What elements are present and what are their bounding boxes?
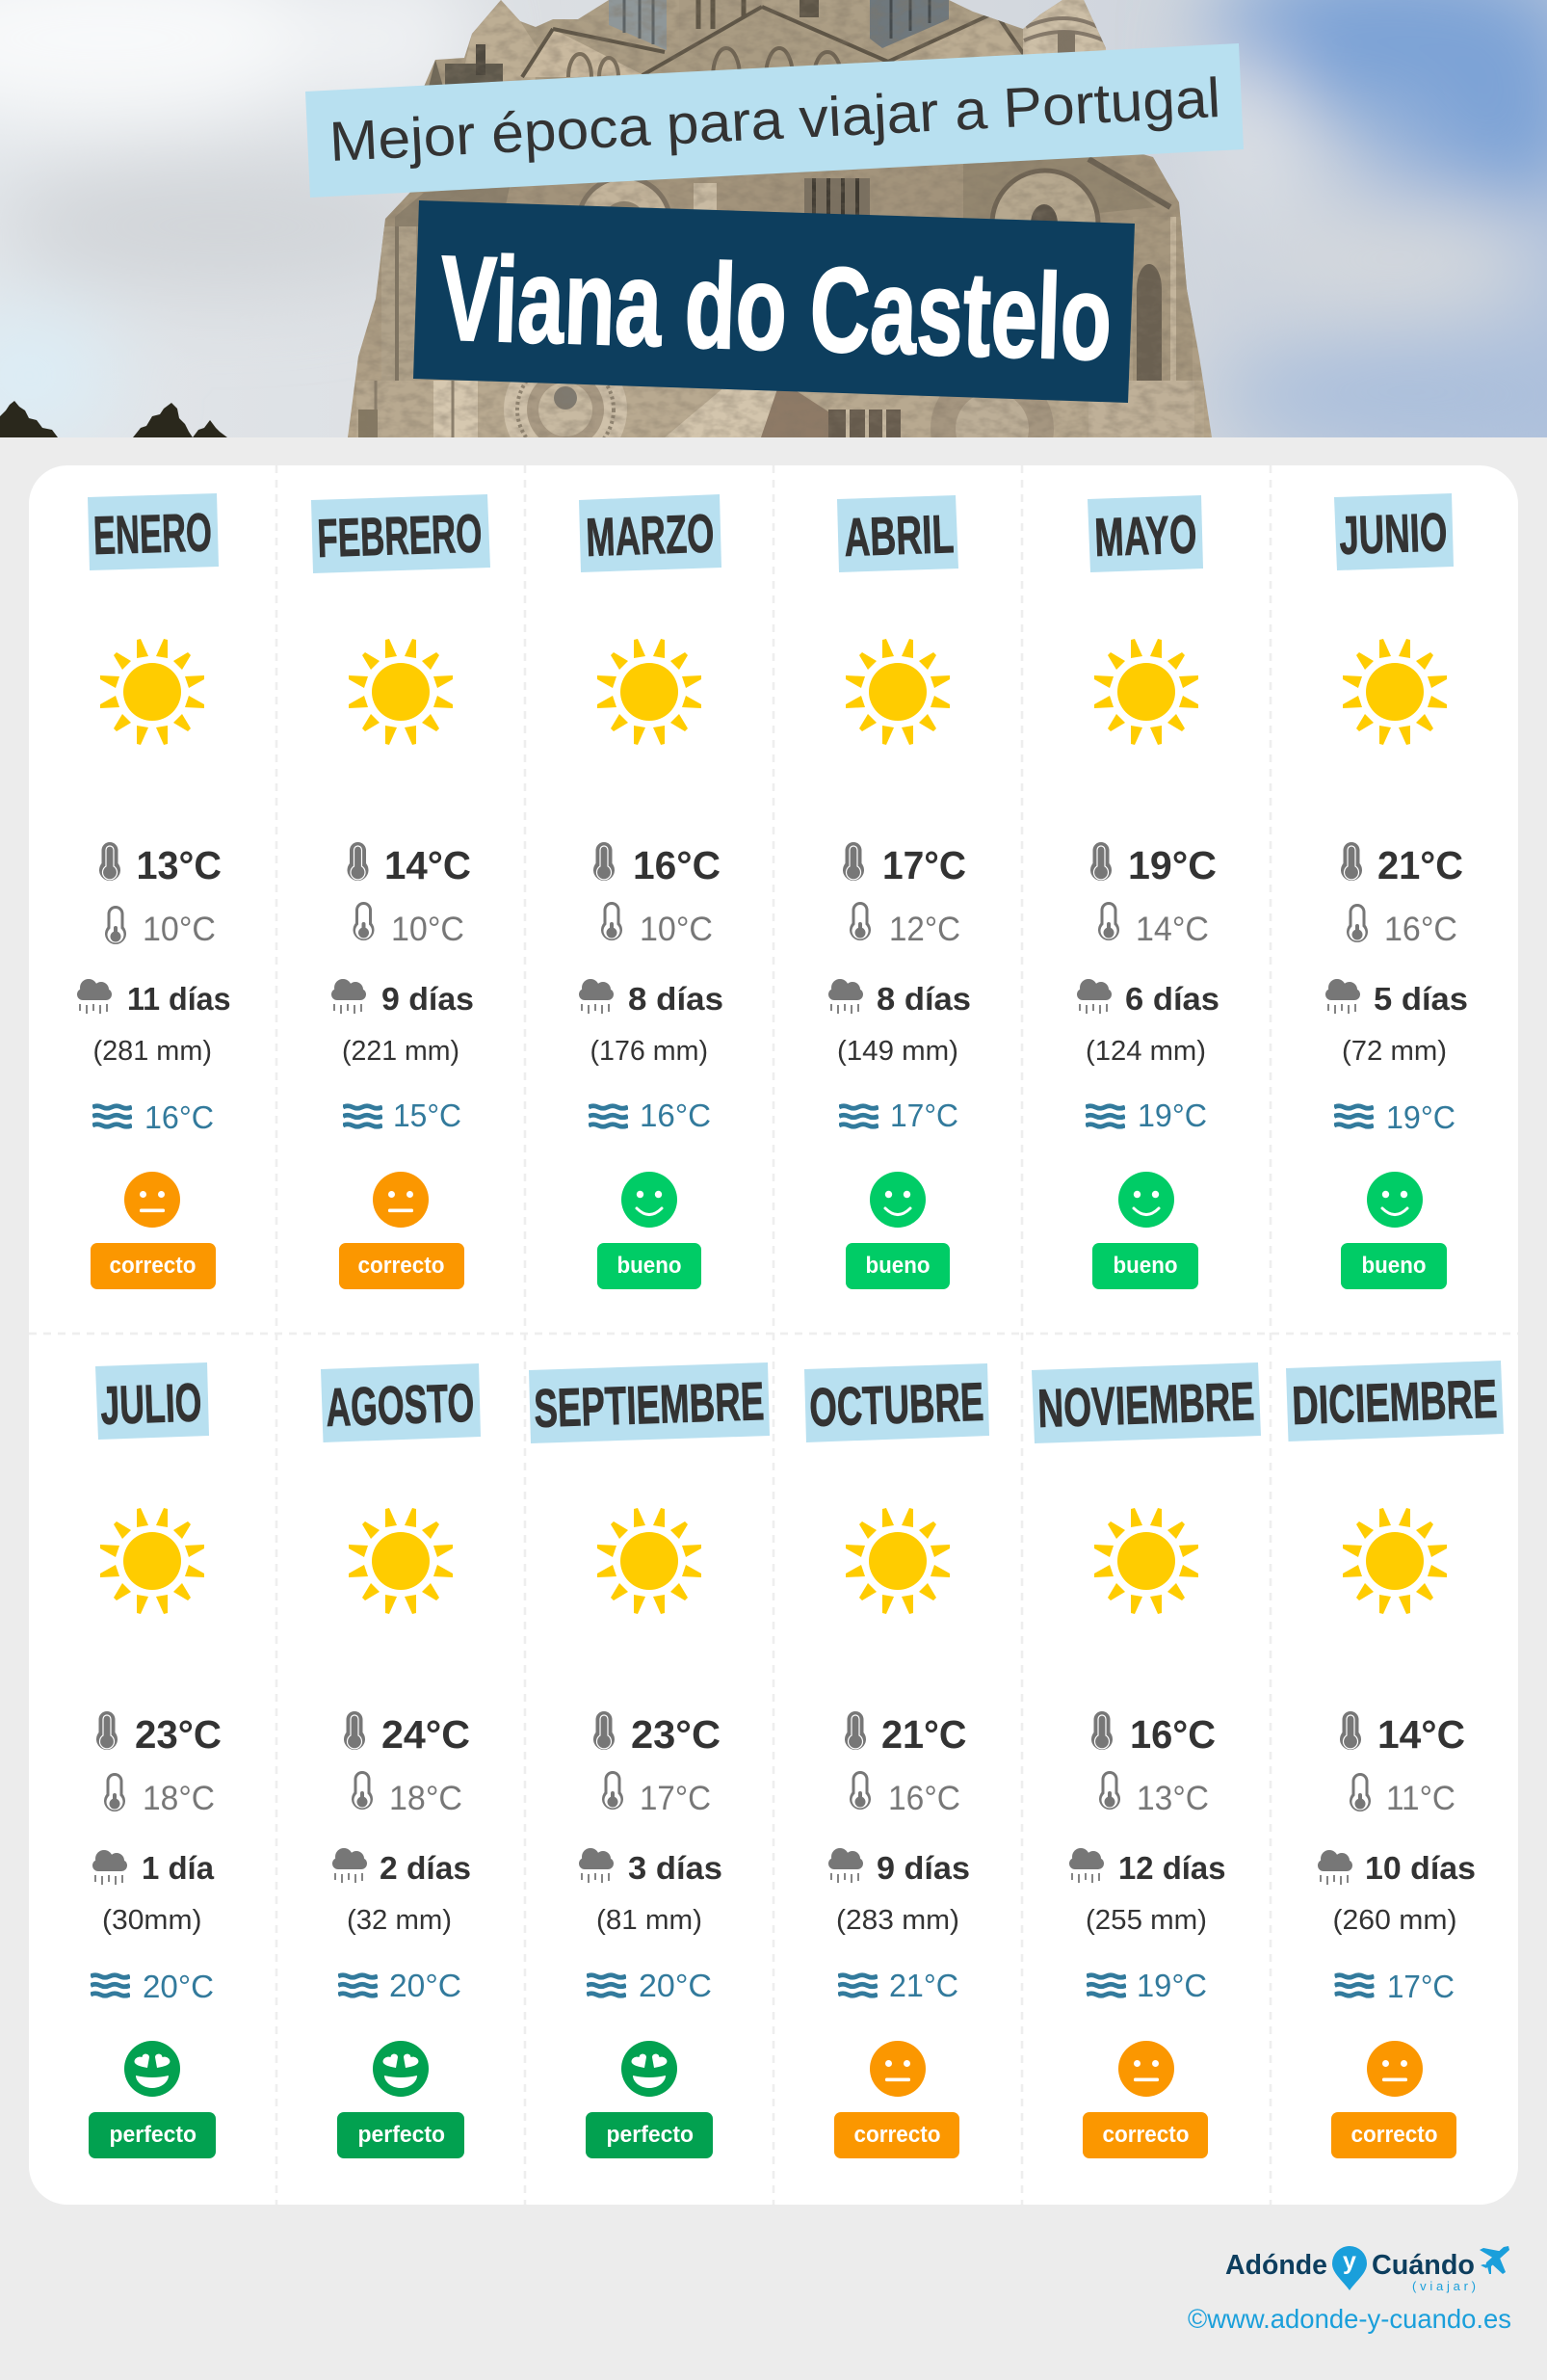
min temperature	[352, 1771, 462, 1817]
rainy days: 8 días	[628, 981, 723, 1017]
icon: smiling face	[1118, 1172, 1174, 1228]
right turret	[1023, 0, 1106, 58]
rainy days: 12 días	[1118, 1850, 1225, 1886]
sea temperature: 17°C	[1387, 1969, 1455, 2004]
icon: smiling face	[621, 1172, 677, 1228]
sea temperature	[91, 1969, 214, 2004]
icon: sun	[846, 639, 950, 745]
sea temperature: 19°C	[1137, 1968, 1207, 2003]
max temperature: 23°C	[135, 1712, 222, 1757]
panel: Diciembre	[1286, 1361, 1504, 2158]
sea temperature: 19°C	[1386, 1099, 1455, 1135]
rating badge: bueno	[1362, 1253, 1426, 1279]
rainy days: 3 días	[628, 1850, 722, 1886]
sea temperature	[1335, 1969, 1455, 2004]
max temperature	[845, 1711, 967, 1757]
month label: NOVIEMBRE	[1036, 1370, 1255, 1439]
month label: ABRIL	[843, 503, 955, 568]
rainy days: 2 días	[380, 1850, 471, 1886]
max temperature: 16°C	[1130, 1712, 1216, 1757]
icon: heart-eyes face	[124, 2041, 180, 2097]
rating badge: correcto	[358, 1253, 445, 1279]
rainy days	[1318, 1850, 1476, 1886]
month label: FEBRERO	[316, 502, 483, 569]
sea temperature: 20°C	[143, 1969, 214, 2004]
panel: Septiembre	[529, 1362, 770, 2158]
stone texture	[337, 0, 1214, 437]
month label: ENERO	[92, 501, 213, 566]
panel: Noviembre	[1032, 1362, 1261, 2158]
title banner	[413, 200, 1135, 403]
month label	[837, 495, 958, 572]
month label	[321, 1363, 481, 1442]
rating badge: perfecto	[358, 2122, 445, 2148]
month label	[88, 493, 219, 570]
max temperature	[96, 1711, 222, 1757]
rating badge	[1092, 1243, 1198, 1289]
rainy days: 1 día	[142, 1850, 215, 1886]
min temperature: 17°C	[640, 1780, 711, 1817]
hero photo: basilica against cloudy sky	[0, 0, 1547, 437]
max temperature	[843, 842, 966, 887]
max temperature: 23°C	[631, 1712, 721, 1757]
rainfall: (30mm)	[102, 1905, 202, 1936]
min temperature	[850, 1771, 960, 1817]
max temperature	[1341, 842, 1463, 887]
icon: sun	[100, 1508, 204, 1614]
max temperature: 19°C	[1128, 843, 1217, 887]
icon: sun	[1343, 1508, 1447, 1614]
icon: smiling face	[870, 1172, 926, 1228]
icon: sun	[1094, 639, 1198, 745]
min temperature: 14°C	[1136, 911, 1209, 948]
month label	[1088, 495, 1203, 572]
min temperature	[601, 902, 713, 948]
right gable	[894, 16, 1021, 62]
left turret	[465, 0, 538, 81]
min temperature: 10°C	[143, 911, 216, 948]
rainy days	[331, 979, 474, 1017]
sea temperature: 16°C	[640, 1097, 711, 1133]
month label: SEPTIEMBRE	[533, 1370, 765, 1439]
month label: OCTUBRE	[808, 1371, 984, 1438]
sea temperature: 17°C	[890, 1097, 958, 1133]
rating badge	[586, 2112, 713, 2158]
min temperature: 12°C	[889, 911, 960, 948]
logo: Adónde y Cuándo: (viajar)	[1412, 2279, 1476, 2293]
rainfall: (221 mm)	[342, 1036, 459, 1067]
min temperature: 18°C	[389, 1780, 462, 1817]
rainfall: (32 mm)	[347, 1905, 452, 1936]
rating badge	[834, 2112, 959, 2158]
rainy days: 10 días	[1365, 1850, 1476, 1886]
glass window right	[870, 0, 949, 48]
rating badge: perfecto	[110, 2122, 197, 2148]
wall between banners	[405, 183, 1175, 198]
rainy days	[579, 1848, 722, 1886]
rainy days	[1077, 979, 1219, 1017]
church silhouette	[348, 0, 1212, 437]
panel: Abril	[828, 495, 971, 1289]
icon: neutral face	[1118, 2041, 1174, 2097]
rating badge: bueno	[1114, 1253, 1177, 1279]
rating badge: correcto	[1350, 2122, 1437, 2148]
icon: location pin: y	[1343, 2248, 1356, 2275]
sea temperature	[338, 1968, 461, 2003]
icon: sun	[349, 639, 453, 745]
panel: Mayo	[1077, 495, 1219, 1289]
max temperature: 21°C	[1377, 843, 1463, 887]
left gable	[524, 31, 642, 77]
rainy days: 11 días	[127, 981, 231, 1017]
rainfall: (255 mm)	[1086, 1905, 1207, 1936]
sea temperature	[92, 1099, 214, 1135]
max temperature: 14°C	[1377, 1712, 1465, 1757]
min temperature	[1098, 902, 1209, 948]
subtitle banner: Mejor época para viajar a Portugal	[328, 66, 1222, 173]
rainy days	[828, 1848, 970, 1886]
sea temperature	[839, 1097, 958, 1133]
central pillar and gable	[679, 0, 762, 58]
rainfall: (260 mm)	[1333, 1905, 1456, 1936]
icon: sun	[349, 1508, 453, 1614]
min temperature	[1347, 904, 1457, 948]
rainy days	[332, 1848, 471, 1886]
rainy days	[579, 979, 723, 1017]
rainy days: 6 días	[1125, 981, 1219, 1017]
sea temperature	[1086, 1097, 1207, 1133]
sea temperature	[343, 1097, 461, 1133]
max temperature: 16°C	[633, 843, 721, 887]
rating badge: correcto	[853, 2122, 940, 2148]
max temperature: 14°C	[384, 843, 471, 887]
max temperature: 24°C	[381, 1712, 470, 1757]
min temperature	[353, 902, 464, 948]
month label	[529, 1362, 770, 1443]
rainfall: (124 mm)	[1086, 1036, 1206, 1067]
max temperature	[344, 1711, 470, 1757]
rating badge	[337, 2112, 464, 2158]
month label: AGOSTO	[325, 1372, 475, 1438]
sea temperature: 20°C	[639, 1968, 712, 2003]
rainy days: 9 días	[381, 981, 474, 1017]
rating badge: correcto	[1102, 2122, 1189, 2148]
month label: MARZO	[585, 502, 715, 568]
icon: neutral face	[870, 2041, 926, 2097]
rainy days: 5 días	[1374, 981, 1468, 1017]
icon: heart-eyes face	[621, 2041, 677, 2097]
icon: sun	[597, 639, 701, 745]
icon: sun	[100, 639, 204, 745]
month label: JUNIO	[1338, 501, 1448, 566]
min temperature: 16°C	[1384, 911, 1457, 948]
max temperature: 17°C	[882, 843, 966, 887]
rating badge: bueno	[616, 1253, 682, 1279]
rainy days	[828, 979, 971, 1017]
min temperature	[850, 902, 960, 948]
sea temperature: 16°C	[144, 1099, 214, 1135]
sea temperature	[1334, 1099, 1455, 1135]
sea temperature: 15°C	[393, 1097, 461, 1133]
min temperature: 10°C	[640, 911, 713, 948]
rating badge: perfecto	[607, 2122, 694, 2148]
sea temperature	[587, 1968, 712, 2003]
month label: JULIO	[99, 1371, 202, 1436]
panel: Agosto	[321, 1363, 481, 2158]
max temperature	[347, 842, 471, 887]
rainy days	[92, 1850, 215, 1886]
min temperature	[105, 906, 216, 948]
rainfall: (81 mm)	[596, 1905, 702, 1936]
rating badge	[846, 1243, 950, 1289]
max temperature	[1091, 1711, 1216, 1757]
rating badge	[89, 2112, 216, 2158]
max temperature	[99, 842, 222, 887]
max temperature: 13°C	[137, 843, 222, 887]
max temperature	[593, 842, 721, 887]
month label	[804, 1363, 989, 1442]
max temperature	[1090, 842, 1217, 887]
logo: Adónde y Cuándo: Adónde	[1225, 2250, 1327, 2281]
side arch and column	[1133, 217, 1193, 385]
min temperature	[602, 1771, 711, 1817]
panel: Octubre	[804, 1363, 989, 2158]
min temperature	[1350, 1773, 1455, 1817]
icon: smiling face	[1367, 1172, 1423, 1228]
icon: neutral face	[1367, 2041, 1423, 2097]
icon: neutral face	[124, 1172, 180, 1228]
icon: location pin	[1332, 2246, 1367, 2290]
rainy days	[77, 979, 231, 1017]
trees	[0, 401, 227, 437]
min temperature: 11°C	[1386, 1780, 1455, 1817]
sea temperature	[838, 1968, 958, 2003]
max temperature: 21°C	[881, 1712, 967, 1757]
title banner: Viana do Castelo	[438, 231, 1114, 385]
rainfall: (72 mm)	[1342, 1036, 1447, 1067]
max temperature	[1340, 1711, 1465, 1757]
min temperature: 18°C	[143, 1780, 215, 1817]
max temperature	[593, 1711, 721, 1757]
rainy days: 8 días	[877, 981, 971, 1017]
rating badge	[1331, 2112, 1456, 2158]
sea temperature	[1087, 1968, 1207, 2003]
rainy days: 9 días	[877, 1850, 970, 1886]
month label	[579, 494, 721, 572]
rating badge	[597, 1243, 701, 1289]
icon: sun	[846, 1508, 950, 1614]
sea temperature: 19°C	[1138, 1097, 1207, 1133]
icon: heart-eyes face	[373, 2041, 429, 2097]
min temperature: 13°C	[1137, 1780, 1209, 1817]
rating badge: correcto	[110, 1253, 197, 1279]
panel: Julio	[89, 1362, 222, 2158]
rainfall: (176 mm)	[590, 1036, 708, 1067]
rating badge	[1083, 2112, 1208, 2158]
rainfall: (283 mm)	[836, 1905, 959, 1936]
sea temperature: 20°C	[389, 1968, 461, 2003]
panel: Junio	[1325, 493, 1468, 1289]
logo: Adónde y Cuándo: Cuándo	[1372, 2250, 1475, 2281]
panel: Febrero	[311, 494, 490, 1289]
website credit: ©www.adonde-y-cuando.es	[1188, 2304, 1511, 2334]
rainfall: (281 mm)	[92, 1036, 212, 1067]
lower facade	[356, 381, 1204, 391]
min temperature	[104, 1773, 215, 1817]
month label	[311, 494, 490, 573]
glass window left	[609, 0, 667, 50]
logo: Adónde y Cuándo	[1225, 2246, 1509, 2293]
sea temperature	[589, 1097, 711, 1133]
month label: MAYO	[1093, 503, 1197, 568]
subtitle banner	[305, 43, 1244, 198]
month label	[1334, 493, 1454, 570]
rainy days	[1069, 1848, 1225, 1886]
rating badge: bueno	[865, 1253, 931, 1279]
month label	[1032, 1362, 1261, 1443]
icon: plane	[1480, 2246, 1509, 2274]
rainy days	[1325, 979, 1468, 1017]
sea temperature: 21°C	[889, 1968, 958, 2003]
panel: Enero	[77, 493, 231, 1289]
rating badge	[339, 1243, 464, 1289]
icon: sun	[1343, 639, 1447, 745]
min temperature: 16°C	[888, 1780, 960, 1817]
min temperature	[1099, 1771, 1209, 1817]
month label	[95, 1362, 209, 1440]
icon: sun	[597, 1508, 701, 1614]
rainfall: (149 mm)	[837, 1036, 958, 1067]
rating badge	[91, 1243, 216, 1289]
icon: neutral face	[373, 1172, 429, 1228]
rating badge	[1341, 1243, 1447, 1289]
icon: sun	[1094, 1508, 1198, 1614]
calendar card	[29, 465, 1518, 2205]
panel: Marzo	[579, 494, 723, 1289]
min temperature: 10°C	[391, 911, 464, 948]
